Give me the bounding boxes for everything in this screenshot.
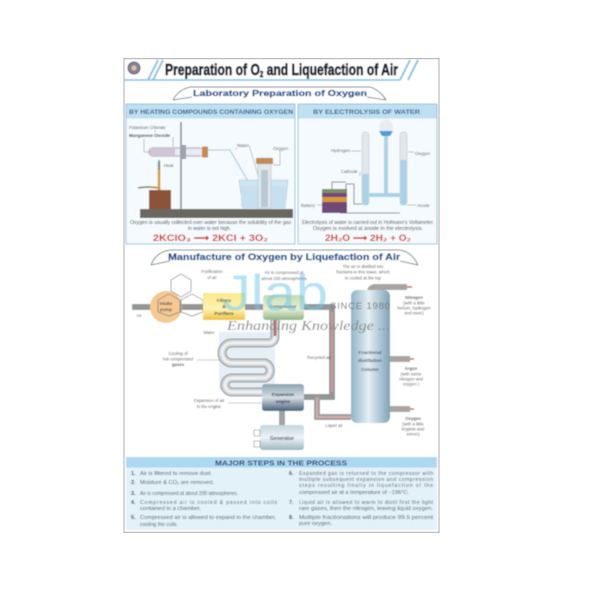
header text: BY ELECTROLYSIS OF WATER xyxy=(313,109,420,116)
step 6 xyxy=(289,471,433,496)
text one: Fractional xyxy=(359,350,381,356)
water label: Water xyxy=(203,330,215,335)
diagram labels xyxy=(136,264,431,436)
text: Generator xyxy=(270,436,294,442)
heading text: Manufacture of Oxygen by Liquefaction of Air xyxy=(168,252,401,262)
step 7: Liquid air is allowed to warm to distil first the light xyxy=(299,500,434,506)
step 4 xyxy=(131,500,277,512)
panel header xyxy=(298,104,436,118)
caption line two: in water is not high. xyxy=(188,226,231,232)
oxygen label: krypton and xyxy=(402,426,425,432)
battery xyxy=(322,189,347,213)
expansion text: Expansion of air xyxy=(194,398,224,403)
amp: & xyxy=(222,304,226,310)
intake pipes xyxy=(132,307,332,397)
oxygen label: xenon) xyxy=(406,432,420,436)
banner outline xyxy=(151,250,418,265)
purifiers: Purifiers xyxy=(214,311,234,317)
manganese label: Manganese Dioxide xyxy=(129,133,171,138)
logo emblem xyxy=(128,62,140,74)
trough xyxy=(239,180,288,208)
nitrogen pipe xyxy=(370,287,412,292)
fractional column xyxy=(351,290,390,423)
retort stand xyxy=(180,122,182,209)
generator xyxy=(254,425,304,450)
distill label: is cooled at the top xyxy=(345,276,382,280)
compress label: about 200 atmospheres xyxy=(261,276,307,281)
bench xyxy=(140,209,293,218)
text: Expansion xyxy=(272,392,294,397)
text two: engine xyxy=(276,399,291,404)
caption xyxy=(130,220,292,232)
heading: manufacture xyxy=(151,250,418,265)
air label: Air xyxy=(136,313,142,318)
caption line two: Oxygen is evolved at anode in the electrolysis. xyxy=(313,226,423,232)
oxygen label: Oxygen xyxy=(405,416,421,421)
step 5: 5. xyxy=(131,515,136,521)
step 8: pure oxygen. xyxy=(299,521,332,527)
left water xyxy=(362,174,368,205)
title rule xyxy=(124,79,400,81)
left tube xyxy=(362,132,369,205)
step 2: 2. xyxy=(131,480,136,486)
compressor pipe red xyxy=(274,320,276,336)
labels left xyxy=(129,125,289,175)
panel frame xyxy=(126,104,295,244)
center tube xyxy=(384,133,388,193)
coil hatch xyxy=(222,320,275,392)
heading: laboratory preparation xyxy=(173,87,386,100)
step 8 xyxy=(289,515,434,527)
argon pipe xyxy=(390,356,414,362)
compress label: Air is compressed at xyxy=(265,270,303,275)
step 6: multiple subsequent expansion and compression xyxy=(299,477,433,483)
oxygen label: Oxygen xyxy=(415,151,431,156)
distill label: fractions in this tower, which xyxy=(336,270,390,274)
body xyxy=(260,425,304,450)
step 1: Air is filtered to remove dust. xyxy=(140,471,212,477)
connector xyxy=(369,193,400,197)
caption xyxy=(302,220,434,232)
shaft xyxy=(279,411,285,426)
tip xyxy=(410,358,414,360)
cooling coil xyxy=(222,320,275,392)
outer pipe xyxy=(317,397,351,417)
step 7: rare gases, then the nitrogen, leaving liquid oxygen. xyxy=(299,506,433,512)
outer xyxy=(390,406,410,412)
coil inner xyxy=(222,320,275,392)
inner line xyxy=(317,397,351,417)
formula: 2H₂O ⟶ 2H₂ + O₂ xyxy=(325,233,411,244)
battery label: Battery xyxy=(301,203,316,208)
purification label: of air xyxy=(207,275,217,280)
blower text: Intake xyxy=(160,301,173,306)
step 1: 1. xyxy=(131,471,136,477)
tip xyxy=(410,408,414,410)
header text: BY HEATING COMPOUNDS CONTAINING OXYGEN xyxy=(129,109,293,116)
plant diagram xyxy=(132,264,431,450)
body xyxy=(263,295,304,320)
step 3: 3. xyxy=(131,491,136,497)
text: Compressor xyxy=(269,304,297,309)
cooling text: Cooling of xyxy=(168,351,188,356)
step 5 xyxy=(131,515,276,528)
cooling leader xyxy=(197,359,220,361)
plus sign: + xyxy=(154,130,156,134)
water cooling tank xyxy=(219,332,275,390)
text three: Column xyxy=(361,367,379,373)
argon label: oxygen ) xyxy=(403,382,420,386)
coil outer xyxy=(222,320,275,392)
watermark logo: Jlab xyxy=(222,265,328,321)
poster xyxy=(124,58,440,533)
filters xyxy=(203,293,245,320)
body xyxy=(262,384,304,411)
steps background xyxy=(126,457,437,530)
panel: heating compounds xyxy=(126,104,295,244)
steps header xyxy=(126,457,437,468)
nitrogen label: and neon) xyxy=(404,310,424,316)
reservoir bulb xyxy=(379,119,393,136)
anode label: Anode xyxy=(417,203,430,208)
wires xyxy=(332,182,400,213)
step 4: 4. xyxy=(131,500,136,506)
intake blower xyxy=(150,274,203,323)
title text: 2 xyxy=(260,70,264,79)
expansion text: in the engine xyxy=(197,404,222,409)
nitrogen label: helium, hydrogen xyxy=(398,306,431,310)
cooling text: hot compressed xyxy=(163,356,194,362)
orange circle xyxy=(150,291,182,323)
text two: distillation xyxy=(358,358,382,364)
watermark xyxy=(222,265,390,334)
caption line one: Electrolysis of water is carried out in Hofmann's Voltameter. xyxy=(302,220,434,226)
step 5: Compressed air is allowed to expand in the chamber, xyxy=(140,515,276,521)
chlorate label: Potassium Chlorate xyxy=(129,125,166,130)
argon label: nitrogen and xyxy=(399,376,424,382)
oxygen label: (with a little xyxy=(402,422,424,426)
step 8: 8. xyxy=(289,515,294,521)
watermark tagline: Enhancing Knowledge ... xyxy=(226,319,390,334)
argon label: Argon xyxy=(405,366,417,371)
purification label: Purification xyxy=(201,269,223,274)
step 6: compressed air at a temperature of −196°C. xyxy=(299,490,409,496)
right tube xyxy=(400,132,407,205)
leader lines xyxy=(144,137,280,175)
hydrogen leader xyxy=(317,151,416,205)
hydrogen label: Hydrogen xyxy=(331,148,351,153)
labels right xyxy=(301,148,431,208)
nitrogen label: (with a little xyxy=(403,300,425,306)
step 3: Air is compressed at about 200 atmospheres. xyxy=(140,491,238,497)
steps title: MAJOR STEPS IN THE PROCESS xyxy=(215,458,347,468)
recycled label: Recycled air xyxy=(307,355,331,360)
step 2: Moisture & CO₂ are removed. xyxy=(140,480,214,486)
filter box xyxy=(203,293,245,320)
panel: major steps xyxy=(126,457,437,530)
panel header xyxy=(126,104,294,118)
title slashes xyxy=(148,60,418,80)
step 6: 6. xyxy=(289,471,294,477)
nitrogen label: Nitrogen xyxy=(405,295,423,300)
oxygen pipe xyxy=(390,406,414,412)
panel: electrolysis xyxy=(298,104,437,244)
title text: Preparation of O xyxy=(165,62,290,79)
filter text: Filters xyxy=(217,298,232,304)
argon label: (with some xyxy=(401,372,422,376)
cooling label xyxy=(163,351,220,367)
test tube xyxy=(148,145,208,159)
step 4: contained in a chamber. xyxy=(140,506,201,512)
formula: 2KClO₃ ⟶ 2KCl + 3O₂ xyxy=(153,233,268,244)
liquid air pipe xyxy=(317,397,351,417)
tip xyxy=(407,286,412,288)
recycle pipe inner xyxy=(331,312,333,392)
cooling text: gases xyxy=(172,362,185,367)
coils xyxy=(254,430,260,447)
heading text: Laboratory Preparation of Oxygen xyxy=(193,88,367,98)
water label: Water xyxy=(237,143,249,148)
step 6: steps resulting finally in liquefaction of the xyxy=(299,483,433,489)
expansion leader xyxy=(228,402,262,404)
liquid label: Liquid air xyxy=(325,423,343,428)
panel frame xyxy=(298,104,437,244)
hexagons xyxy=(158,274,203,316)
title text: and Liquefaction of Air xyxy=(263,62,398,79)
watermark since: SINCE 1980 xyxy=(330,301,390,312)
right water xyxy=(400,160,406,205)
voltameter xyxy=(362,119,407,205)
expansion label xyxy=(194,398,262,409)
distill label: The air is distilled into xyxy=(342,264,384,269)
step 8: Multiple fractionations will produce 99.5 percent xyxy=(299,515,434,521)
step 7 xyxy=(289,500,434,512)
blower text two: pump xyxy=(160,307,172,312)
expansion engine xyxy=(262,384,304,426)
caption line one: Oxygen is usually collected over water because the solubility of the gas xyxy=(130,220,292,226)
outer xyxy=(390,356,410,362)
step 5: cooling the coils. xyxy=(140,522,178,528)
oxygen label: Oxygen xyxy=(273,146,289,151)
heat label: Heat xyxy=(164,163,174,168)
step 7: 7. xyxy=(289,500,294,506)
burner xyxy=(138,160,171,209)
outer xyxy=(370,287,407,292)
title band xyxy=(124,60,418,80)
delivery tube xyxy=(208,150,262,198)
step 6: Expanded gas is returned to the compressor with xyxy=(299,471,433,477)
cathode label: Cathode xyxy=(341,169,358,174)
gas jar xyxy=(256,158,273,208)
body xyxy=(351,290,390,423)
banner outline xyxy=(173,87,386,100)
compressor xyxy=(263,295,304,320)
step 4: Compressed air is cooled & passed into coils xyxy=(140,500,277,506)
poster sheet xyxy=(124,58,440,533)
